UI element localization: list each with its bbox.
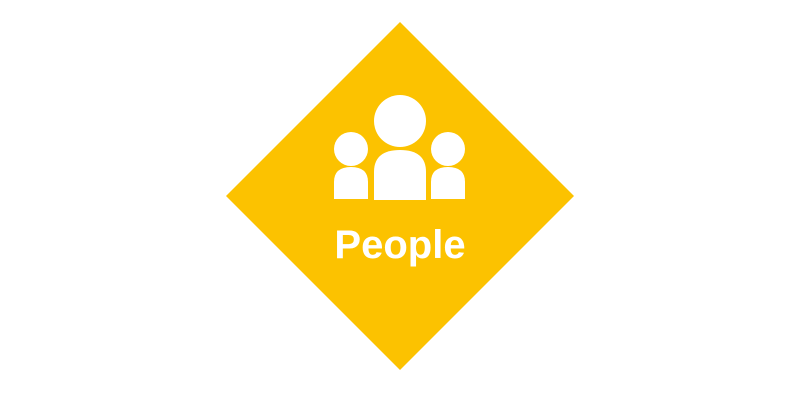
icon: people group bbox=[334, 95, 465, 200]
title: People: People bbox=[334, 223, 466, 267]
panel: yellow diamond bbox=[226, 22, 574, 370]
